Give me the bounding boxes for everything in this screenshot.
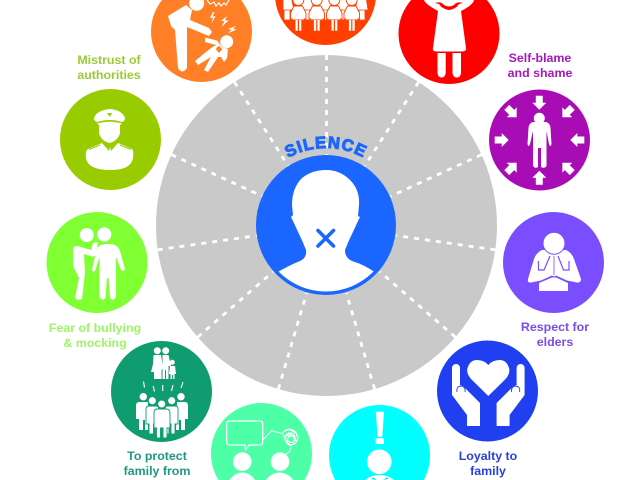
label: Fear of bullying	[49, 321, 141, 335]
panel: talking and confused thoughts	[211, 403, 312, 480]
icon: woman holding head	[424, 0, 474, 78]
panel: respect for elders	[503, 212, 604, 349]
icon: hands holding heart	[452, 360, 525, 426]
icon: group of girls	[283, 0, 368, 31]
panel: violence	[151, 0, 252, 82]
icon: praying person	[528, 232, 581, 291]
panel: fear	[398, 0, 500, 84]
label: Respect for	[521, 320, 589, 334]
icon: police officer	[86, 109, 133, 170]
label: Self-blame	[509, 51, 571, 65]
icon: adult hitting child	[168, 0, 236, 72]
centre circle	[256, 155, 396, 295]
label: elders	[537, 335, 573, 349]
label: Loyalty to	[459, 449, 518, 463]
label: Mistrust of	[77, 53, 142, 67]
label: family	[470, 464, 506, 478]
panel: warning person	[329, 405, 430, 480]
panel: loyalty to family	[437, 340, 538, 478]
icon: two people with speech bubble and scribble	[227, 421, 298, 480]
panel: peer pressure group	[275, 0, 376, 45]
panel: central wheel	[156, 55, 497, 396]
label: authorities	[77, 68, 141, 82]
label: To protect	[127, 449, 187, 463]
label: and shame	[508, 66, 572, 80]
icon: person whispering to another	[73, 227, 125, 300]
panel: fear of bullying and mocking	[46, 212, 148, 350]
label: & mocking	[63, 336, 127, 350]
icon: person with arrows pointing inward	[495, 96, 584, 185]
icon: silenced head	[278, 170, 374, 292]
icon: family above crowd	[136, 347, 188, 438]
heading: SILENCE: SILENCE	[284, 136, 368, 158]
panel: to protect family	[111, 341, 212, 478]
label: family from	[124, 464, 190, 478]
gray disc	[156, 55, 497, 396]
panel: self-blame and shame	[489, 51, 590, 190]
panel: mistrust of authorities	[60, 53, 161, 190]
icon: person with exclamation mark	[358, 412, 402, 480]
